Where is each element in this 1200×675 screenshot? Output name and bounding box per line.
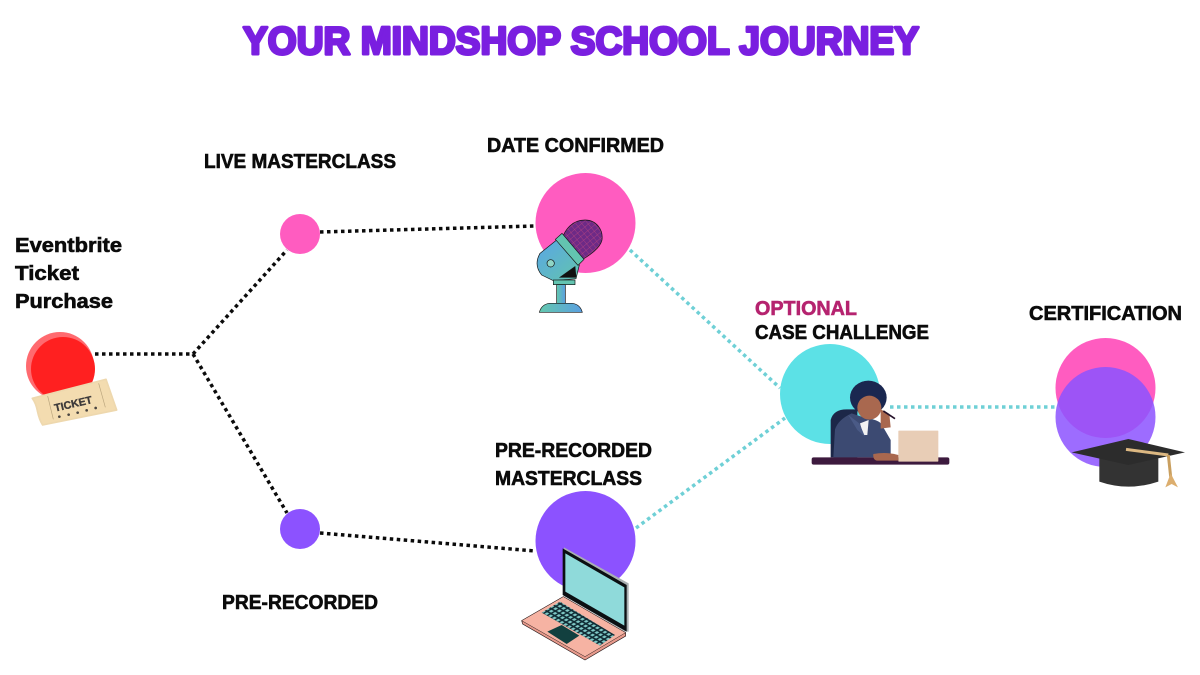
black dotted connectors [95, 226, 535, 551]
label: Eventbrite Ticket Purchase [15, 235, 122, 313]
node: small purple circle [280, 509, 320, 549]
label: live masterclass: LIVE MASTERCLASS [204, 151, 396, 173]
label: pre-recorded masterclass: PRE-RECORDED [495, 440, 652, 462]
label: pre-recorded masterclass [495, 440, 652, 490]
label: pre-recorded: PRE-RECORDED [222, 592, 378, 614]
label: optional case challenge: CASE CHALLENGE [755, 322, 929, 344]
label: Eventbrite Ticket Purchase: Purchase [15, 291, 113, 313]
node: purple circle [536, 491, 636, 591]
title: YOUR MINDSHOP SCHOOL JOURNEY [243, 20, 919, 63]
teal dotted connectors [630, 250, 1056, 528]
icon: laptop [522, 547, 629, 660]
label: pre-recorded masterclass: MASTERCLASS [495, 468, 642, 490]
label: date confirmed: DATE CONFIRMED [487, 135, 664, 157]
node: overlapping circles [1056, 338, 1156, 467]
node: cyan circle [780, 344, 880, 444]
label: optional case challenge [755, 298, 929, 344]
icon: ticket [32, 379, 117, 425]
node: ticket purchase [15, 235, 122, 425]
label: certification: CERTIFICATION [1029, 303, 1182, 325]
label: optional case challenge: OPTIONAL [755, 298, 857, 320]
node: pink circle [536, 173, 636, 273]
icon: red circles [26, 332, 95, 401]
icon: person at desk [812, 381, 949, 465]
icon: ticket: TICKET [53, 394, 94, 415]
label: Eventbrite Ticket Purchase: Ticket [15, 263, 79, 285]
icon: microphone [537, 220, 602, 312]
icon: graduation cap [1072, 439, 1185, 487]
node: small pink circle [280, 214, 320, 254]
label: Eventbrite Ticket Purchase: Eventbrite [15, 235, 122, 257]
